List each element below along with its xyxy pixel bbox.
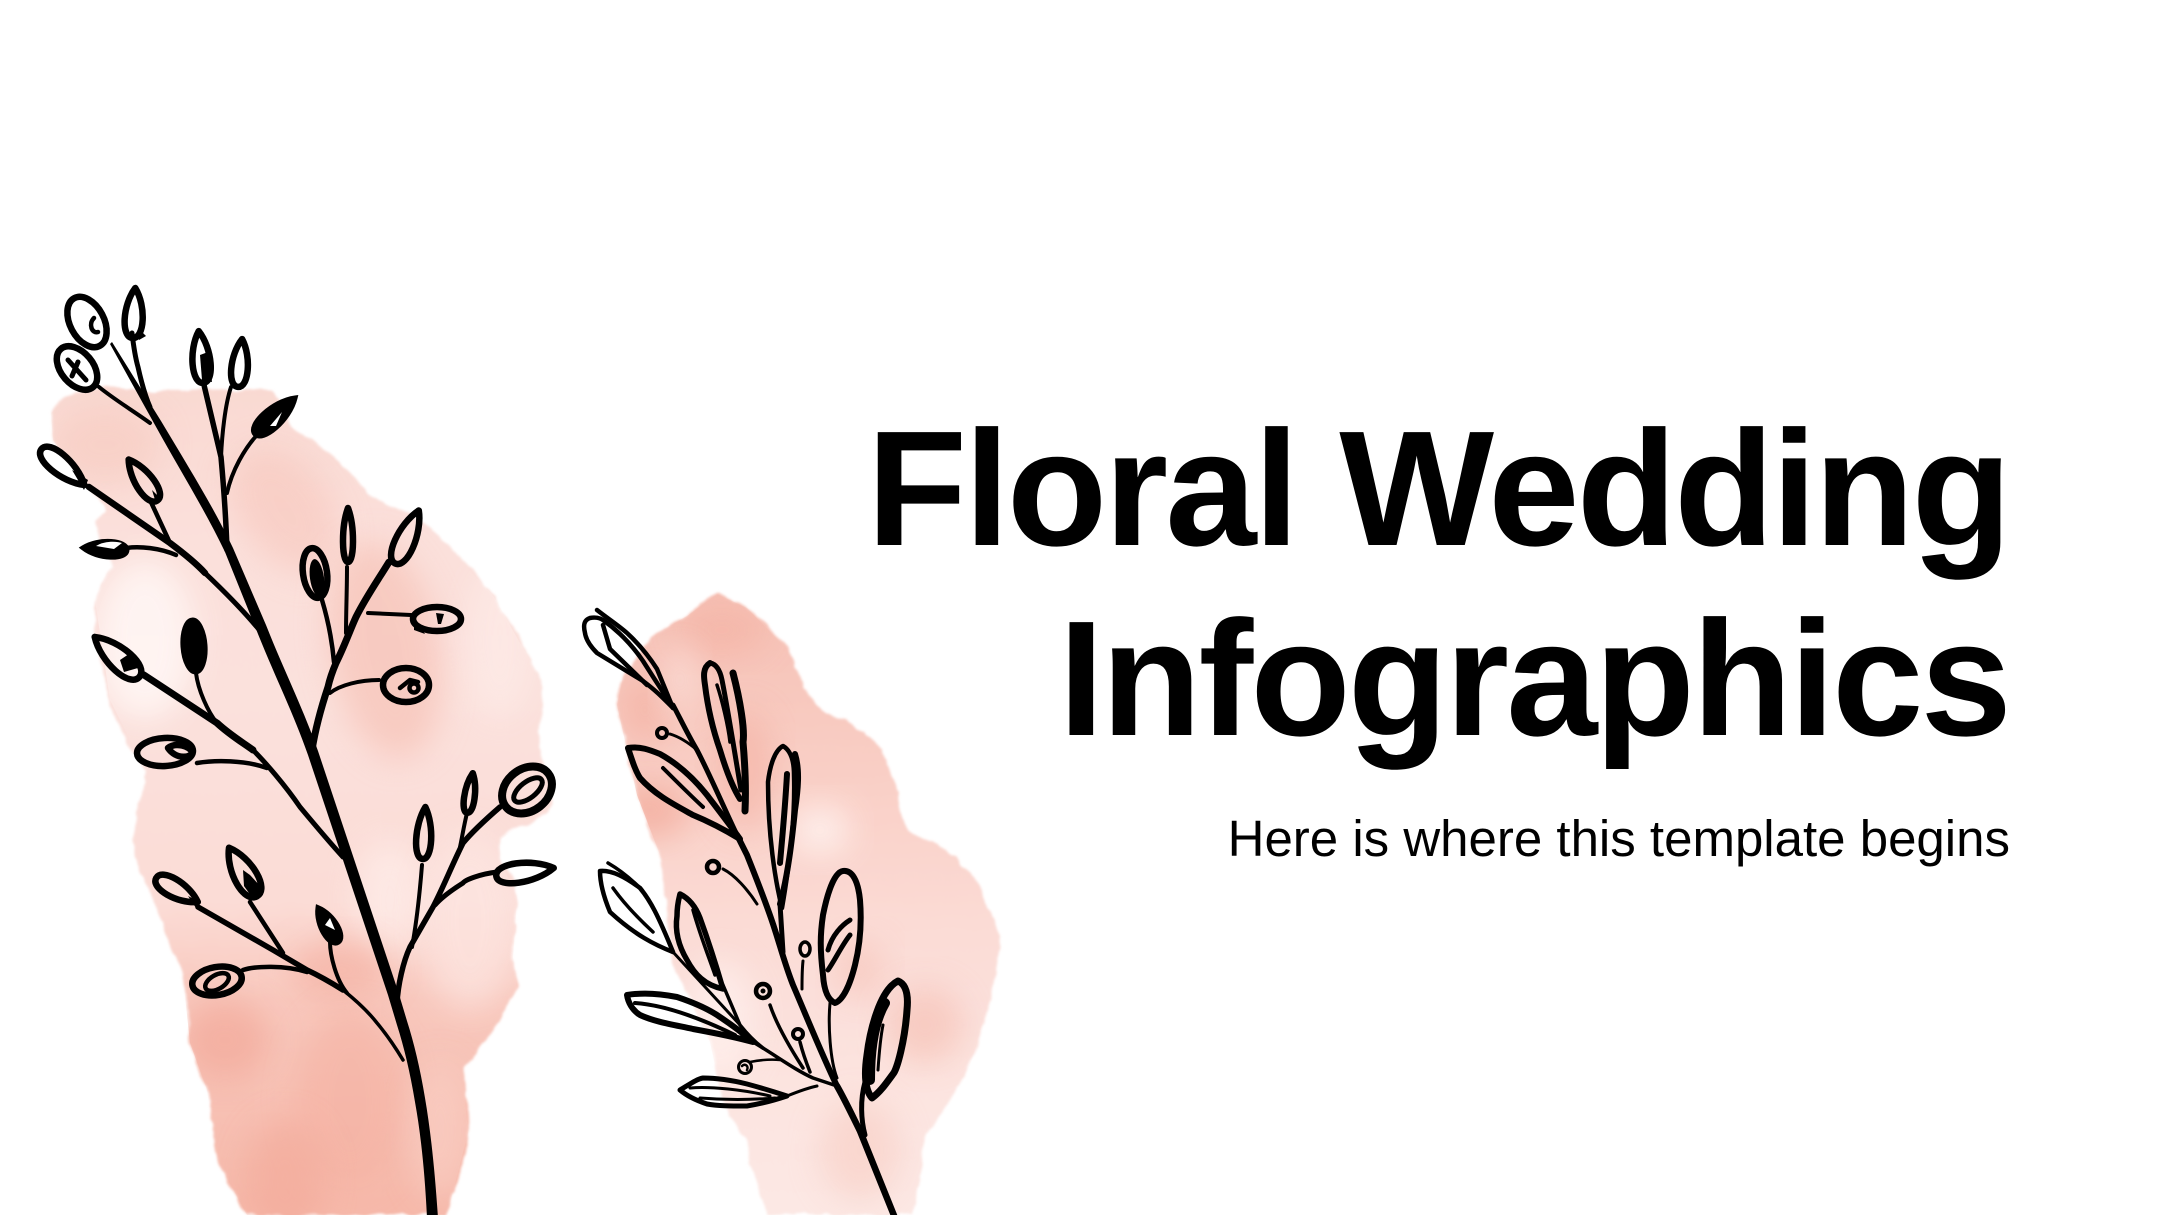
leaf 2 [704,663,745,811]
left plant with watercolour wash [35,288,561,1215]
main stem: right plant [673,705,895,1215]
small bud 4 [756,984,770,998]
bud 5 [230,338,250,388]
side branches: right plant [670,734,865,1135]
bud 6 [249,391,301,441]
bud 25 [190,963,244,999]
bud 22 [152,870,202,910]
small bud 1 [657,728,667,738]
bud 15 [87,629,147,685]
buds: left plant [35,288,561,999]
bud 9 [83,540,127,558]
watercolour blob: left [51,387,551,1215]
small bud 5 [793,1029,803,1039]
right plant with watercolour wash [584,594,1000,1215]
bud 21 [495,858,555,886]
upper branches and stems: left plant [89,333,261,632]
leaf 10 [680,1078,787,1106]
bud 3 [49,339,105,397]
leaf 7 [600,863,673,952]
small bud 6 [738,1060,752,1074]
lower branches: left plant [198,807,500,1060]
bud 24 [311,904,345,946]
bud 13 [413,607,461,634]
bud 4 [190,330,212,384]
title: Floral Wedding [867,397,2009,580]
bud 8 [121,454,165,506]
subtitle: Here is where this template begins [1228,810,2010,867]
middle right branch: left plant [312,562,411,750]
watercolour shading: right [610,605,963,1200]
bud 1 [59,290,115,354]
bud 16 [181,619,207,673]
bud 17 [136,737,194,767]
bud 12 [386,507,428,567]
leaf 6 [865,981,907,1098]
leaf 5 [821,871,861,1003]
leaf 1 [584,610,673,708]
leaf 3 [628,747,740,839]
title [867,397,2009,770]
leaf 4 [768,746,798,908]
illustration: watercolour floral artwork [36,284,1002,1215]
leaf 9 [627,994,753,1042]
watercolour blob: right [617,594,1000,1215]
bud 14 [383,668,429,702]
leaves: right plant [584,610,907,1106]
bud 18 [493,757,561,823]
bud 2 [124,288,146,340]
small bud 3 [800,942,810,956]
leaf 8 [676,894,723,989]
bud 23 [219,842,267,902]
middle left branch: left plant [144,673,343,857]
bud 19 [462,772,478,814]
bud 10 [300,547,330,599]
small bud 2 [707,861,719,873]
watercolour shading: left [50,405,535,1215]
bud 7 [35,442,91,492]
bud 11 [343,508,353,562]
main stem: left plant [110,342,438,1215]
bud 20 [415,807,433,859]
title: Infographics [1059,587,2009,770]
